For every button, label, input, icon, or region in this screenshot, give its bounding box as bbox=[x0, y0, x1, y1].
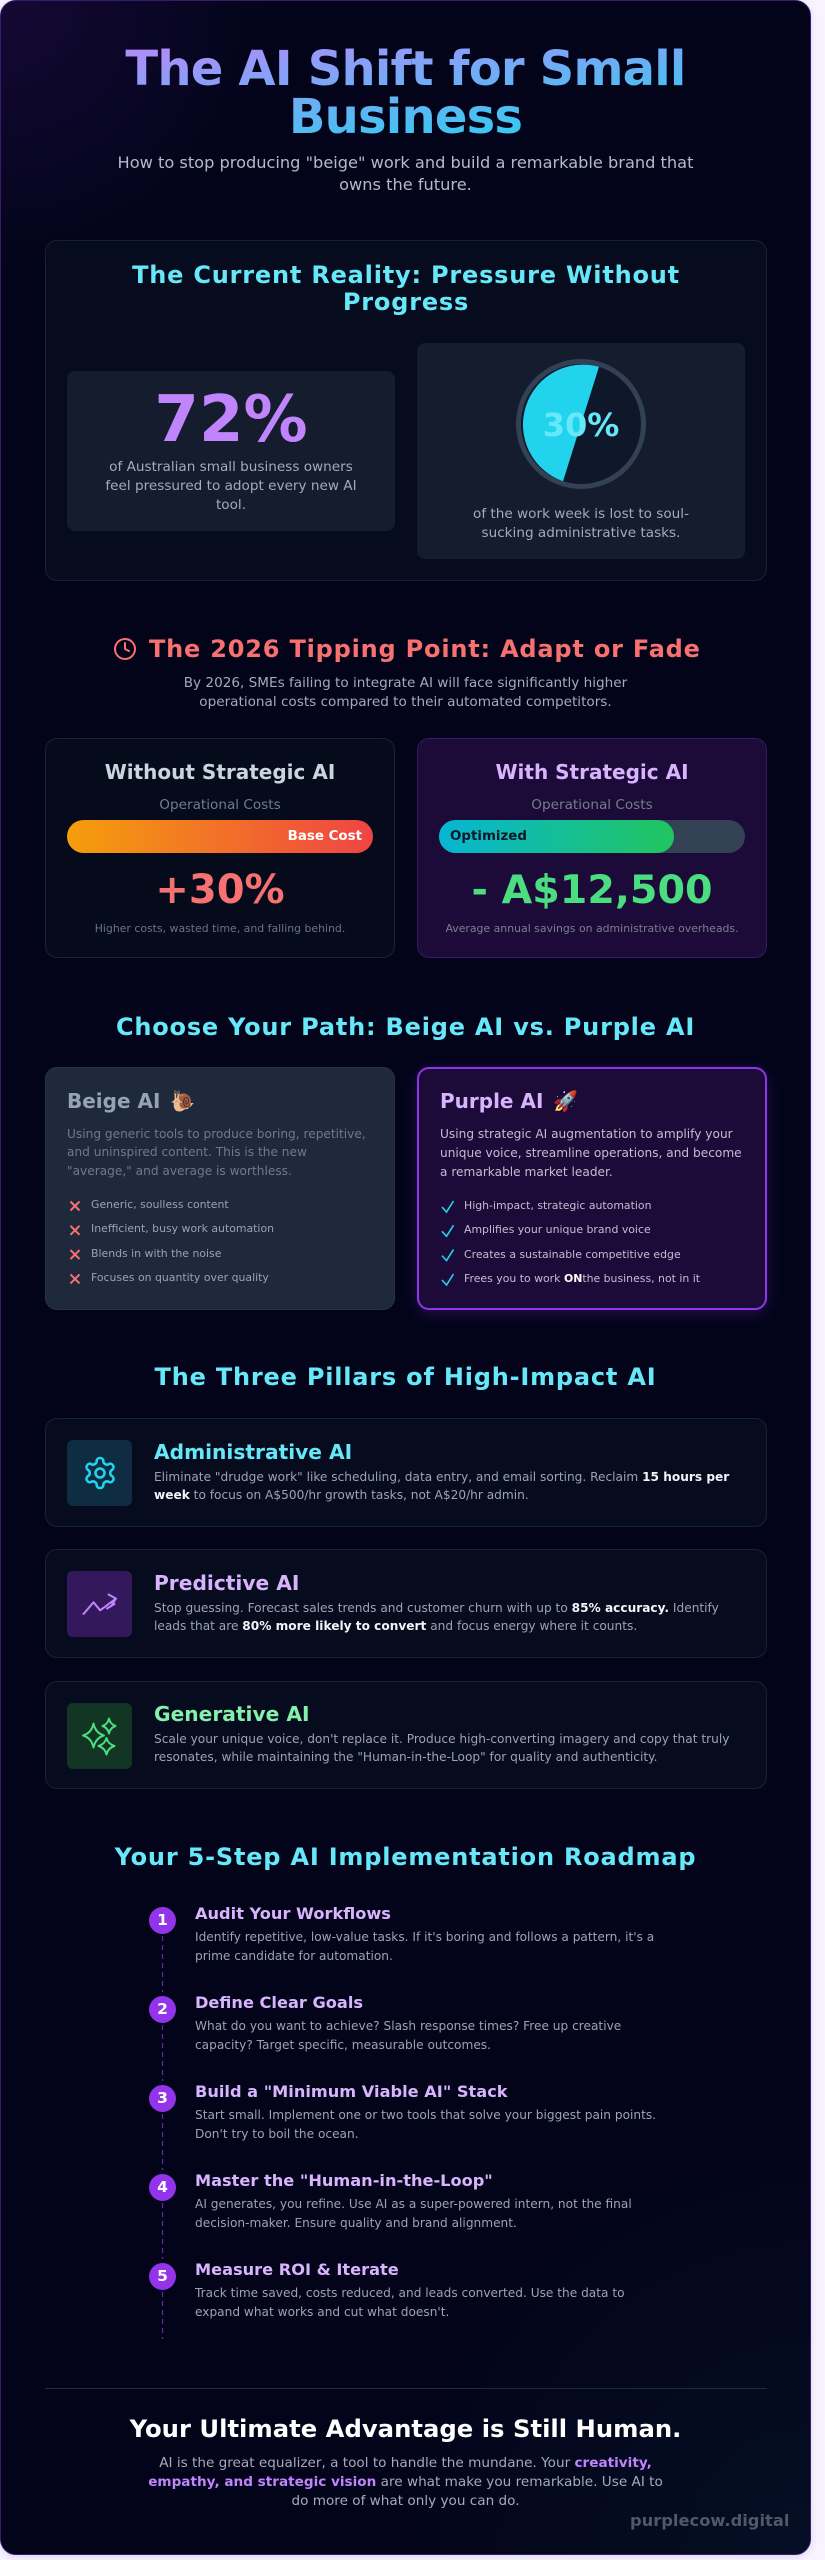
title bbox=[45, 45, 766, 141]
step 4: AI generates, you refine. Use AI as a super-powered intern, not the final bbox=[195, 2197, 632, 2211]
stat caption: feel pressured to adopt every new AI bbox=[105, 478, 357, 494]
list: beige drawbacks: Focuses on quantity over quality bbox=[91, 1271, 269, 1284]
card caption: Higher costs, wasted time, and falling behind. bbox=[95, 922, 345, 935]
heading: roadmap: Your 5-Step AI Implementation Roadmap bbox=[115, 1843, 696, 1871]
tipping point intro: operational costs compared to their automated competitors. bbox=[199, 694, 612, 710]
pillar title: Predictive AI bbox=[154, 1571, 299, 1595]
timeline: roadmap steps bbox=[149, 1904, 656, 2339]
step 3 bbox=[149, 2082, 656, 2141]
pillar description: Eliminate "drudge work" like scheduling, data entry, and email sorting. Reclaim 15 hours per bbox=[154, 1470, 729, 1484]
panel: predictive AI bbox=[45, 1549, 767, 1658]
list: purple benefits bbox=[442, 1199, 700, 1286]
closing heading: Your Ultimate Advantage is Still Human. bbox=[130, 2414, 681, 2443]
step 2: 2 bbox=[157, 2000, 168, 2018]
list: beige drawbacks: Inefficient, busy work automation bbox=[91, 1222, 274, 1235]
tipping point intro bbox=[184, 675, 628, 710]
bar: optimized: Optimized bbox=[450, 829, 527, 844]
icon: gear bbox=[67, 1440, 132, 1506]
pillar description: week to focus on A$500/hr growth tasks, not A$20/hr admin. bbox=[154, 1488, 529, 1502]
step 4: Master the "Human-in-the-Loop" bbox=[195, 2171, 493, 2190]
step 5: expand what works and cut what doesn't. bbox=[195, 2305, 449, 2319]
list: purple benefits: High-impact, strategic automation bbox=[464, 1199, 651, 1212]
bar: optimized bbox=[439, 820, 745, 853]
step 3: Start small. Implement one or two tools that solve your biggest pain points. bbox=[195, 2108, 656, 2122]
stat caption: sucking administrative tasks. bbox=[482, 525, 680, 541]
step 1 bbox=[149, 1904, 654, 1963]
panel: administrative AI bbox=[45, 1418, 767, 1527]
pillar title: Generative AI bbox=[154, 1702, 310, 1726]
step 2: What do you want to achieve? Slash response times? Free up creative bbox=[195, 2019, 621, 2033]
description bbox=[67, 1126, 366, 1178]
pillar description: leads that are 80% more likely to convert and focus energy where it counts. bbox=[154, 1619, 637, 1633]
step 1: Identify repetitive, low-value tasks. If it's boring and follows a pattern, it's a bbox=[195, 1930, 654, 1944]
bar: base cost: Base Cost bbox=[288, 829, 362, 844]
step 2 bbox=[149, 1993, 621, 2052]
step 5 bbox=[149, 2260, 625, 2319]
step 4: decision-maker. Ensure quality and brand alignment. bbox=[195, 2216, 517, 2230]
step 1: prime candidate for automation. bbox=[195, 1949, 393, 1963]
heading: current reality: Progress bbox=[343, 288, 469, 316]
card caption: Average annual savings on administrative overheads. bbox=[445, 922, 739, 935]
stat caption bbox=[105, 459, 357, 513]
icon: trend arrow bbox=[67, 1571, 132, 1637]
subtitle: owns the future. bbox=[339, 175, 472, 194]
bar: base cost bbox=[67, 820, 373, 853]
step 1: Audit Your Workflows bbox=[195, 1904, 391, 1923]
closing paragraph: do more of what only you can do. bbox=[291, 2493, 520, 2509]
pillar description bbox=[154, 1470, 730, 1502]
heading: current reality bbox=[132, 260, 680, 316]
panel: beige AI bbox=[45, 1067, 395, 1310]
description: "average," and average is worthless. bbox=[67, 1164, 292, 1178]
stat caption bbox=[473, 506, 689, 541]
description: Using generic tools to produce boring, repetitive, bbox=[67, 1126, 366, 1140]
heading: choose your path: Choose Your Path: Beige AI vs. Purple AI bbox=[116, 1012, 695, 1040]
pie chart: 30 percent: 30% bbox=[543, 406, 619, 444]
heading: current reality: The Current Reality: Pressure Without bbox=[132, 260, 680, 288]
step 2: capacity? Target specific, measurable outcomes. bbox=[195, 2038, 491, 2052]
list: beige drawbacks bbox=[70, 1198, 274, 1284]
value: +30%: +30% bbox=[155, 867, 285, 913]
subtitle: How to stop producing "beige" work and build a remarkable brand that bbox=[118, 153, 693, 172]
bar label: Operational Costs bbox=[159, 797, 281, 813]
step 1: 1 bbox=[157, 1910, 168, 1928]
value: savings: - A$12,500 bbox=[471, 867, 713, 913]
subtitle bbox=[118, 153, 694, 194]
panel: current reality bbox=[45, 240, 767, 581]
pillar description bbox=[154, 1600, 719, 1633]
description: unique voice, streamline operations, and become bbox=[440, 1146, 742, 1160]
stat caption: of Australian small business owners bbox=[109, 459, 353, 475]
list: purple benefits: Frees you to work ONthe business, not in it bbox=[464, 1272, 700, 1285]
card title: With Strategic AI bbox=[495, 760, 689, 784]
pie chart: 30 percent bbox=[516, 359, 646, 489]
bar label: Operational Costs bbox=[531, 797, 653, 813]
title: The AI Shift for Small bbox=[125, 41, 686, 97]
heading: tipping point: The 2026 Tipping Point: Adapt or Fade bbox=[149, 635, 701, 663]
pillar description: resonates, while maintaining the "Human-in-the-Loop" for quality and authenticity. bbox=[154, 1750, 657, 1764]
description bbox=[440, 1127, 742, 1179]
pillar description bbox=[154, 1732, 729, 1764]
step 3: Don't try to boil the ocean. bbox=[195, 2127, 359, 2141]
closing paragraph: empathy, and strategic vision are what make you remarkable. Use AI to bbox=[148, 2474, 663, 2490]
stat caption: tool. bbox=[216, 497, 246, 513]
closing paragraph bbox=[148, 2454, 663, 2509]
step 2: Define Clear Goals bbox=[195, 1993, 363, 2012]
panel: without strategic AI bbox=[45, 738, 395, 958]
step 5: Track time saved, costs reduced, and leads converted. Use the data to bbox=[195, 2286, 625, 2300]
list: beige drawbacks: Blends in with the noise bbox=[91, 1247, 221, 1260]
step 5: Measure ROI & Iterate bbox=[195, 2260, 399, 2279]
card title with snail: Beige AI 🐌 bbox=[67, 1089, 195, 1113]
icon: sparkles bbox=[67, 1703, 132, 1769]
pillar description: Stop guessing. Forecast sales trends and customer churn with up to 85% accuracy. Identify bbox=[154, 1600, 719, 1614]
description: a remarkable market leader. bbox=[440, 1165, 613, 1179]
description: Using strategic AI augmentation to amplify your bbox=[440, 1127, 733, 1141]
list: purple benefits: Amplifies your unique brand voice bbox=[464, 1223, 651, 1236]
stat card: 30 percent bbox=[417, 343, 745, 559]
stat value: 72%: 72% bbox=[154, 383, 308, 457]
pillar title: Administrative AI bbox=[154, 1440, 352, 1464]
timeline dashed connector bbox=[162, 1936, 164, 2339]
list: beige drawbacks: Generic, soulless content bbox=[91, 1198, 229, 1211]
step 3: 3 bbox=[157, 2088, 168, 2106]
step 3: Build a "Minimum Viable AI" Stack bbox=[195, 2082, 508, 2101]
icon: clock bbox=[114, 638, 136, 660]
description: and uninspired content. This is the new bbox=[67, 1145, 307, 1159]
step 4 bbox=[149, 2171, 632, 2230]
brand watermark: purplecow.digital bbox=[630, 2511, 789, 2530]
panel: generative AI bbox=[45, 1681, 767, 1789]
panel: purple AI bbox=[417, 1067, 767, 1310]
title: Business bbox=[289, 89, 522, 145]
card title with rocket: Purple AI 🚀 bbox=[440, 1089, 578, 1113]
stat caption: of the work week is lost to soul- bbox=[473, 506, 689, 522]
step 5: 5 bbox=[157, 2266, 168, 2284]
heading: three pillars: The Three Pillars of High-Impact AI bbox=[155, 1363, 656, 1391]
card title: Without Strategic AI bbox=[105, 760, 335, 784]
pillar description: Scale your unique voice, don't replace it. Produce high-converting imagery and copy that truly bbox=[154, 1732, 729, 1746]
stat card: 72 percent bbox=[67, 371, 395, 531]
tipping point intro: By 2026, SMEs failing to integrate AI will face significantly higher bbox=[184, 675, 627, 691]
step 4: 4 bbox=[157, 2178, 168, 2196]
panel: with strategic AI bbox=[417, 738, 767, 958]
list: purple benefits: Creates a sustainable competitive edge bbox=[464, 1248, 681, 1261]
closing paragraph: AI is the great equalizer, a tool to handle the mundane. Your creativity, bbox=[159, 2454, 652, 2470]
